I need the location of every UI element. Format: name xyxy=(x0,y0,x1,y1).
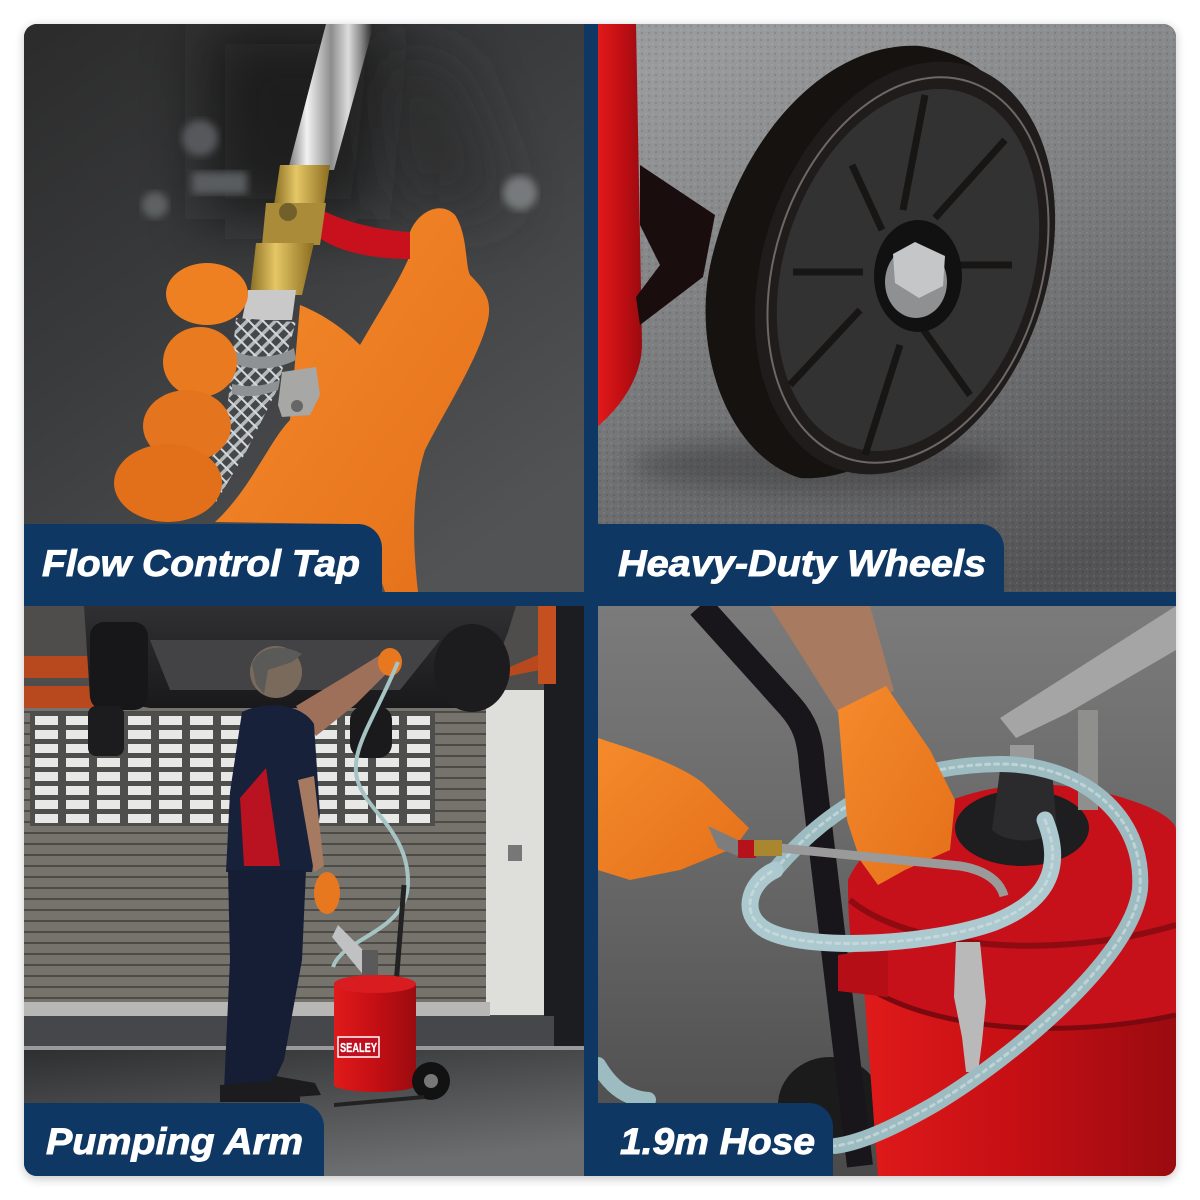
panel: pumping arm xyxy=(24,606,584,1176)
icon: brass fitting xyxy=(250,165,330,295)
icon: clear hose xyxy=(333,662,408,967)
icon: wheel xyxy=(706,46,1056,478)
icon: braided hose xyxy=(208,290,320,502)
icon: metal nozzle wand xyxy=(708,826,1004,896)
icon: spare wheel xyxy=(778,1057,874,1138)
icon: chrome pipe xyxy=(288,24,374,170)
icon: trolley handle xyxy=(700,606,860,1166)
icon: pump lever xyxy=(1000,606,1176,738)
car underside xyxy=(84,606,516,758)
label tab: 1.9m Hose: 1.9m Hose xyxy=(620,1121,815,1162)
panel: 1.9m hose xyxy=(598,606,1176,1176)
icon: orange glove palm xyxy=(215,208,489,592)
icon: pump head xyxy=(955,710,1098,866)
label tab: Heavy-Duty Wheels: Heavy-Duty Wheels xyxy=(618,543,986,584)
icon: red drum xyxy=(838,784,1176,1176)
icon: axle bracket xyxy=(636,165,715,325)
panel: heavy-duty wheels xyxy=(598,22,1176,592)
label tab: Pumping Arm: Pumping Arm xyxy=(46,1121,303,1162)
icon: red tap handle xyxy=(318,208,410,259)
icon: forearm top xyxy=(770,606,894,713)
icon: right glove xyxy=(838,686,955,885)
label tab: 1.9m Hose xyxy=(598,1103,833,1176)
lift arms xyxy=(24,654,540,708)
icon: left glove xyxy=(598,738,749,880)
label tab: Heavy-Duty Wheels xyxy=(598,524,1004,592)
label tab: Flow Control Tap: Flow Control Tap xyxy=(42,543,360,584)
panel: flow control tap xyxy=(24,24,584,592)
label tab: Flow Control Tap xyxy=(24,524,382,592)
icon: mechanic xyxy=(220,646,402,1102)
icon: red pump tank: SEALEY xyxy=(340,1040,377,1055)
icon: red pump tank xyxy=(332,885,450,1105)
icon: glove fingers xyxy=(114,263,248,522)
label tab: Pumping Arm xyxy=(24,1103,324,1176)
icon: red tank xyxy=(598,24,642,426)
icon: coiled hose xyxy=(598,764,1140,1146)
